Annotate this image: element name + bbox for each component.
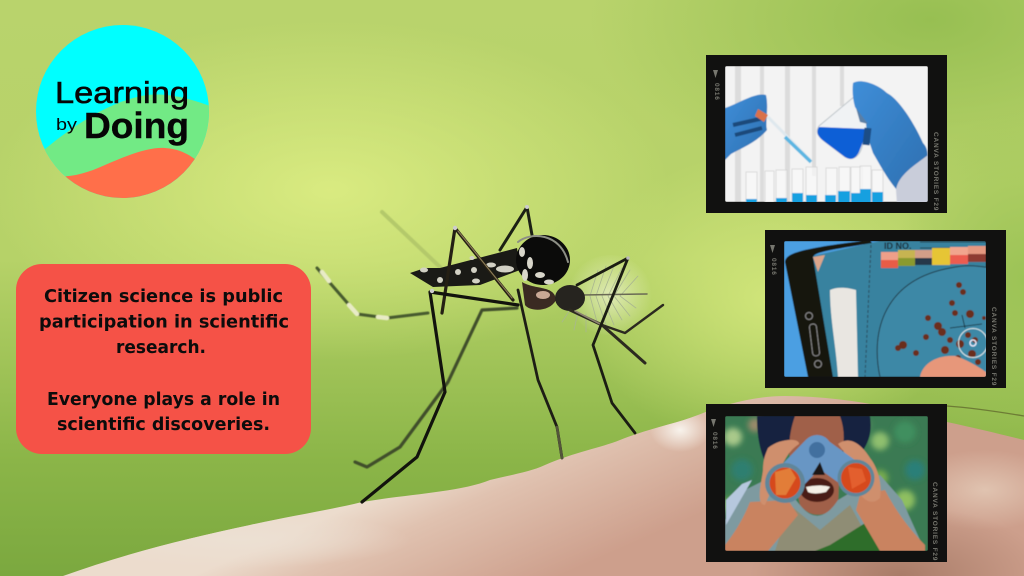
logo text: by [56, 115, 78, 134]
hands [760, 440, 799, 505]
photo frame: child looking through binoculars: CANVA STORIES F29 [931, 482, 938, 561]
photo frame: phone photographing insects on a chart: CANVA STORIES F29 [990, 307, 997, 386]
colour swatches [881, 246, 986, 268]
photo frame: phone photographing insects on a chart: 0816 [770, 258, 777, 276]
photo frame: lab scientist with blue liquid [706, 55, 947, 213]
message text: Citizen science is public [44, 287, 283, 307]
logo text [55, 75, 189, 146]
thorax [516, 235, 570, 285]
message text: research. [116, 338, 206, 358]
insects [895, 282, 986, 365]
phone screen surroundings [784, 241, 880, 377]
photo frame: lab scientist with blue liquid: CANVA STORIES F29 [932, 132, 939, 211]
message text: scientific discoveries. [57, 415, 270, 435]
right glove [853, 81, 928, 190]
photo frame: lab scientist with blue liquid: 0816 [713, 83, 720, 101]
message text: participation in scientific [39, 312, 289, 332]
finger [920, 356, 986, 377]
message text [39, 287, 289, 435]
blurred rear legs [317, 212, 517, 467]
focus ring [958, 328, 988, 358]
photo frame: child looking through binoculars: 0816 [711, 432, 718, 450]
face [789, 416, 844, 515]
message text: Everyone plays a role in [47, 390, 280, 410]
logo text: Doing [84, 105, 189, 146]
head [555, 285, 585, 311]
chart labels: ID NO. [884, 241, 912, 251]
proboscis and palps [570, 310, 645, 363]
shirt [725, 475, 925, 551]
test tubes [746, 166, 883, 204]
flask [816, 97, 864, 159]
panel: citizen science message [16, 264, 311, 454]
mosquito [317, 205, 663, 502]
photo frame: phone photographing insects on a chart [765, 230, 1006, 388]
plant [816, 524, 880, 551]
sleeve [896, 155, 928, 204]
white smudge [830, 288, 858, 377]
phone body [785, 240, 872, 377]
logo text: Learning [55, 75, 189, 110]
left glove [725, 95, 767, 160]
skin surface in the foreground [63, 396, 1024, 576]
front legs [577, 258, 635, 433]
leg crossing the abdomen [442, 228, 513, 313]
hair [757, 416, 871, 462]
logo: Learning by Doing [36, 25, 209, 198]
back leg over the abdomen [500, 207, 532, 250]
antenna plume [562, 255, 652, 335]
mouth [800, 478, 834, 502]
abdomen [410, 248, 520, 287]
photo frame: child looking through binoculars [706, 404, 947, 562]
arms [725, 500, 798, 551]
binoculars [765, 442, 874, 503]
